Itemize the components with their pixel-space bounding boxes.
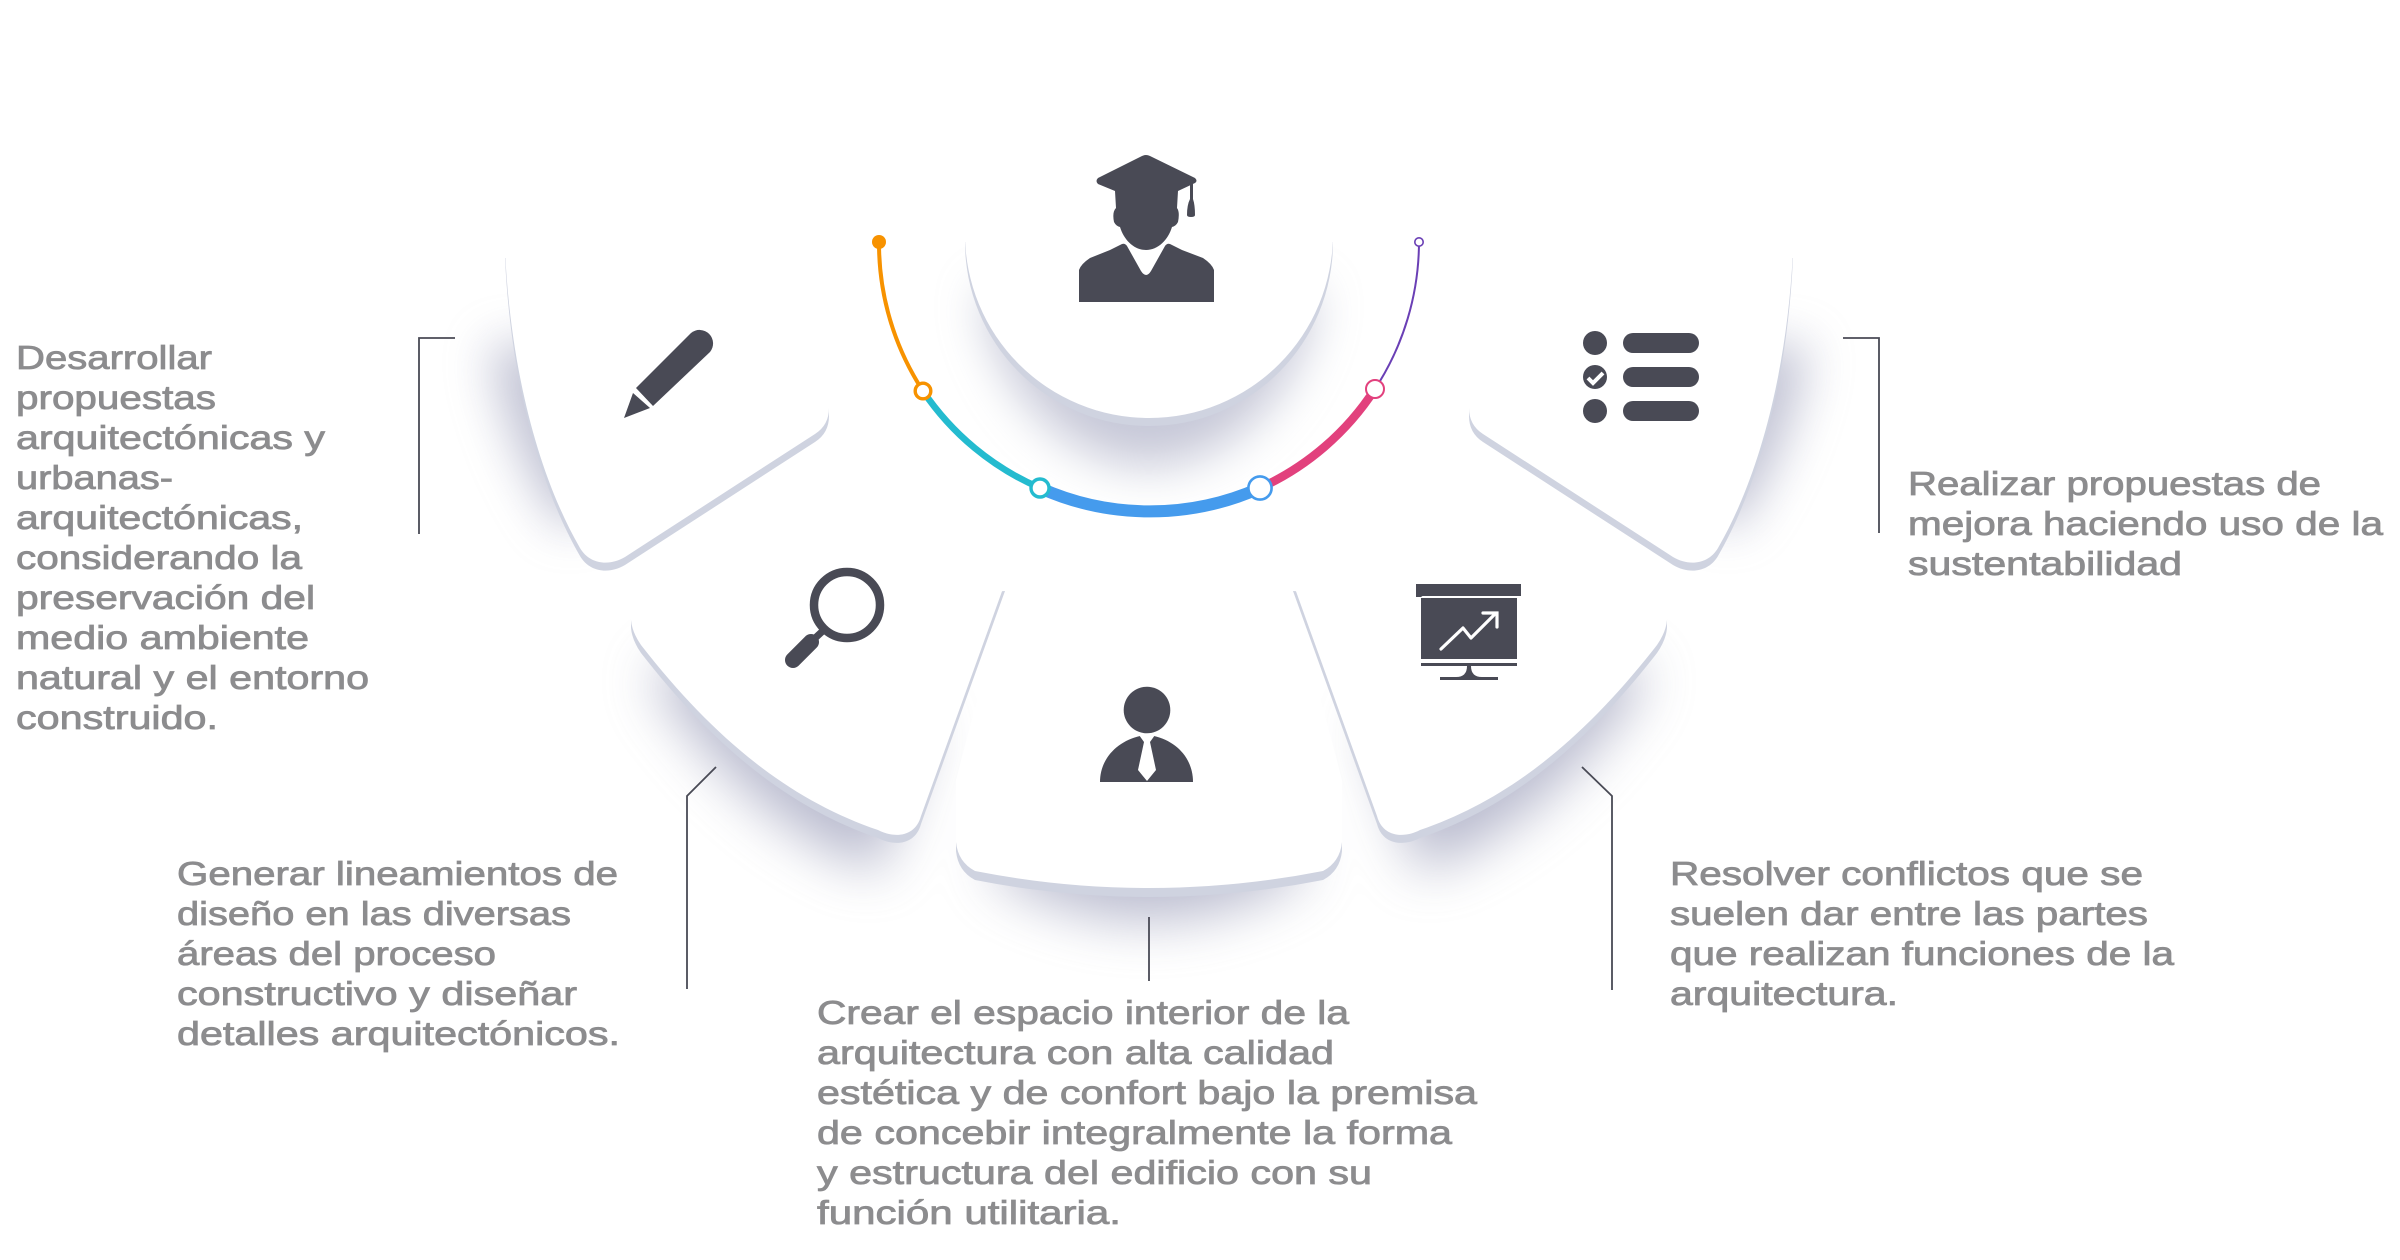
text block: resolver: Resolver conflictos que se bbox=[1670, 855, 2143, 892]
text block: generar: diseño en las diversas bbox=[177, 895, 571, 932]
panel: bottom petal bbox=[956, 590, 1342, 897]
panel: top center bowl bbox=[965, 150, 1333, 426]
text block: desarrollar: arquitectónicas y bbox=[16, 419, 326, 456]
text block: crear: función utilitaria. bbox=[817, 1194, 1121, 1231]
text block: generar: áreas del proceso bbox=[177, 935, 496, 972]
text block: desarrollar: Desarrollar bbox=[16, 339, 212, 376]
text block: resolver bbox=[1670, 855, 2175, 1012]
progress arc bbox=[872, 235, 1423, 511]
text block: crear: de concebir integralmente la forma bbox=[817, 1114, 1453, 1151]
icon: business person bbox=[1100, 687, 1193, 782]
text block: desarrollar: medio ambiente bbox=[16, 619, 309, 656]
text block: realizar: mejora haciendo uso de la bbox=[1908, 505, 2384, 542]
text block: generar: detalles arquitectónicos. bbox=[177, 1015, 620, 1052]
text block: crear bbox=[817, 994, 1478, 1231]
text block: desarrollar: considerando la bbox=[16, 539, 303, 576]
text block: crear: estética y de confort bajo la premisa bbox=[817, 1074, 1478, 1111]
text block: crear: arquitectura con alta calidad bbox=[817, 1034, 1334, 1071]
icon: checklist bbox=[1583, 331, 1699, 423]
text block: resolver: suelen dar entre las partes bbox=[1670, 895, 2148, 932]
text block: realizar: Realizar propuestas de bbox=[1908, 465, 2321, 502]
text block: realizar: sustentabilidad bbox=[1908, 545, 2182, 582]
text block: desarrollar bbox=[16, 339, 369, 736]
text block: generar: constructivo y diseñar bbox=[177, 975, 577, 1012]
text block: desarrollar: natural y el entorno bbox=[16, 659, 369, 696]
text block: desarrollar: arquitectónicas, bbox=[16, 499, 303, 536]
icon: magnifier bbox=[793, 572, 880, 660]
text block: generar: Generar lineamientos de bbox=[177, 855, 618, 892]
connector lines bbox=[419, 338, 1879, 990]
panel: top-right petal bbox=[1469, 200, 1793, 571]
icon: graduate bbox=[1079, 155, 1214, 302]
icon: pencil bbox=[624, 330, 713, 418]
text block: crear: y estructura del edificio con su bbox=[817, 1154, 1372, 1191]
panel: lower-left petal bbox=[631, 560, 1005, 843]
text block: generar bbox=[177, 855, 620, 1052]
text block: desarrollar: preservación del bbox=[16, 579, 315, 616]
panel: lower-right petal bbox=[1293, 560, 1667, 843]
text block: desarrollar: propuestas bbox=[16, 379, 216, 416]
text block: desarrollar: construido. bbox=[16, 699, 218, 736]
icon: presentation board bbox=[1416, 584, 1521, 680]
text block: desarrollar: urbanas- bbox=[16, 459, 173, 496]
text block: realizar bbox=[1908, 465, 2384, 582]
panel: top-left petal bbox=[505, 200, 829, 571]
text block: resolver: arquitectura. bbox=[1670, 975, 1898, 1012]
shadows behind petals bbox=[490, 290, 1808, 920]
text block: resolver: que realizan funciones de la bbox=[1670, 935, 2175, 972]
text block: crear: Crear el espacio interior de la bbox=[817, 994, 1350, 1031]
